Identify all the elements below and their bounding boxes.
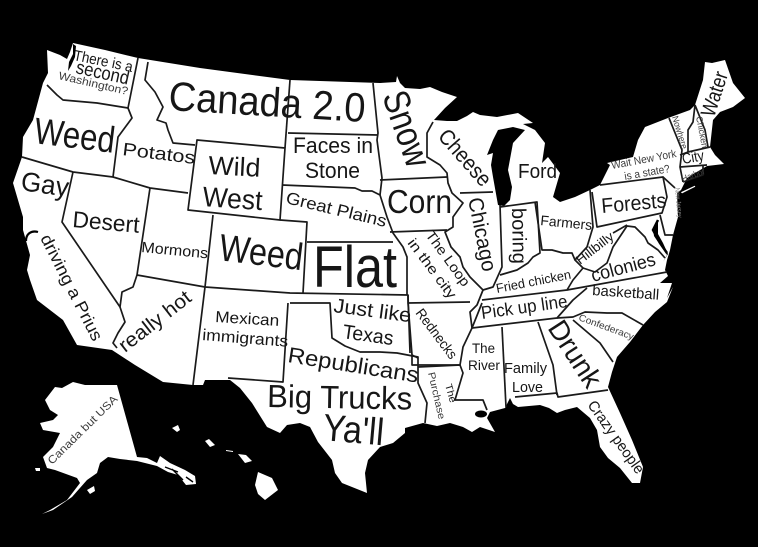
- Long Island: [680, 185, 696, 194]
- state labels: [19, 47, 733, 477]
- Alabama label: [504, 360, 547, 396]
- Oklahoma label: Just like: [332, 295, 413, 327]
- Oklahoma label: [332, 295, 413, 350]
- Wyoming label: [202, 150, 264, 216]
- New Mexico label: Mexican: [215, 309, 280, 330]
- Washington label: second: [74, 57, 131, 90]
- Hawaii: [172, 425, 278, 500]
- South Dakota label: [293, 133, 373, 183]
- New York label: is a state?: [623, 163, 671, 183]
- Wyoming label: West: [202, 181, 264, 216]
- Minnesota label: Snow: [374, 85, 439, 172]
- California south label: driving a Prius: [36, 231, 106, 344]
- Louisiana label: The: [442, 383, 458, 405]
- California north label: Gay: [19, 166, 71, 203]
- Iowa label: Corn: [387, 183, 452, 220]
- Wyoming label: Wild: [208, 150, 261, 183]
- Washington label: There is a: [72, 47, 135, 76]
- Vermont label: Nowhere: [670, 115, 690, 150]
- Arkansas label: Rednecks: [413, 305, 461, 362]
- Nebraska label: Great Plains: [284, 188, 389, 231]
- South Dakota label: Faces in: [293, 133, 373, 158]
- Massachusetts label: City: [681, 147, 706, 168]
- Texas label: Big Trucks: [267, 378, 412, 417]
- Louisiana label: [425, 371, 458, 421]
- Alabama label: Family: [504, 360, 547, 377]
- Ohio label: Farmers: [540, 212, 593, 233]
- Oklahoma label: Texas: [341, 321, 395, 350]
- New Hampshire label: Chicken: [694, 115, 710, 149]
- Missouri label: The Loop: [423, 227, 474, 290]
- New Mexico label: [202, 309, 289, 351]
- Mississippi label: [468, 340, 500, 373]
- Mississippi delta inlet: [475, 410, 487, 418]
- Kansas label: Flat: [313, 235, 397, 300]
- South Dakota label: Stone: [305, 158, 360, 183]
- North Carolina label: basketball: [592, 282, 660, 304]
- Michigan label: Ford: [518, 161, 557, 183]
- Chesapeake outline strokes: [653, 220, 667, 253]
- Wisconsin label: Cheese: [433, 124, 497, 191]
- Chesapeake Bay: [653, 220, 668, 262]
- Nevada label: Desert: [72, 206, 141, 238]
- Texas label: Ya'll: [321, 407, 386, 454]
- South Carolina label: Confederacy: [577, 312, 635, 343]
- New York label: Wait New York: [610, 148, 678, 172]
- state borders: [22, 58, 710, 423]
- Lake Michigan: [487, 127, 525, 206]
- New York label: [610, 148, 678, 183]
- West Virginia label: Hillbilly: [573, 228, 617, 267]
- Idaho label: Potatos: [122, 139, 196, 168]
- Pennsylvania label: Forests: [600, 189, 667, 218]
- Connecticut label: Harbor: [680, 166, 706, 184]
- New Mexico label: immigrants: [202, 327, 289, 351]
- Alaska label: Canada but USA: [46, 393, 121, 467]
- contiguous US silhouette: [13, 43, 745, 493]
- New Jersey label: New Jersey: [673, 188, 683, 218]
- Tennessee label: Pick up line: [480, 291, 569, 323]
- Virginia label: colonies: [589, 249, 658, 287]
- Utah label: Mormons: [141, 239, 209, 262]
- Georgia label: Drunk: [542, 314, 609, 394]
- Maine label: Water: [697, 69, 733, 120]
- Puget Sound: [68, 44, 76, 71]
- Illinois label: Chicago: [463, 195, 501, 273]
- Arizona label: really hot: [115, 286, 196, 357]
- Mississippi label: River: [468, 357, 500, 373]
- Colorado label: Weed: [217, 227, 305, 279]
- Mississippi label: The: [472, 340, 495, 356]
- Texas label: [267, 342, 421, 454]
- Louisiana label: Purchase: [425, 371, 447, 421]
- Florida label: Crazy people: [584, 397, 648, 477]
- Missouri label: in the city: [405, 235, 460, 302]
- Montana label: Canada 2.0: [167, 73, 367, 131]
- Washington label: [57, 47, 135, 98]
- San Francisco Bay: [26, 231, 38, 241]
- Texas label: Republicans: [286, 342, 421, 388]
- Indiana label: boring: [507, 208, 530, 264]
- Alabama label: Love: [512, 379, 543, 396]
- Washington label: Washington?: [57, 70, 129, 98]
- Kentucky label: Fried chicken: [495, 267, 572, 296]
- Missouri label: [405, 227, 474, 302]
- Alaska: [35, 382, 196, 514]
- Oregon label: Weed: [32, 110, 117, 161]
